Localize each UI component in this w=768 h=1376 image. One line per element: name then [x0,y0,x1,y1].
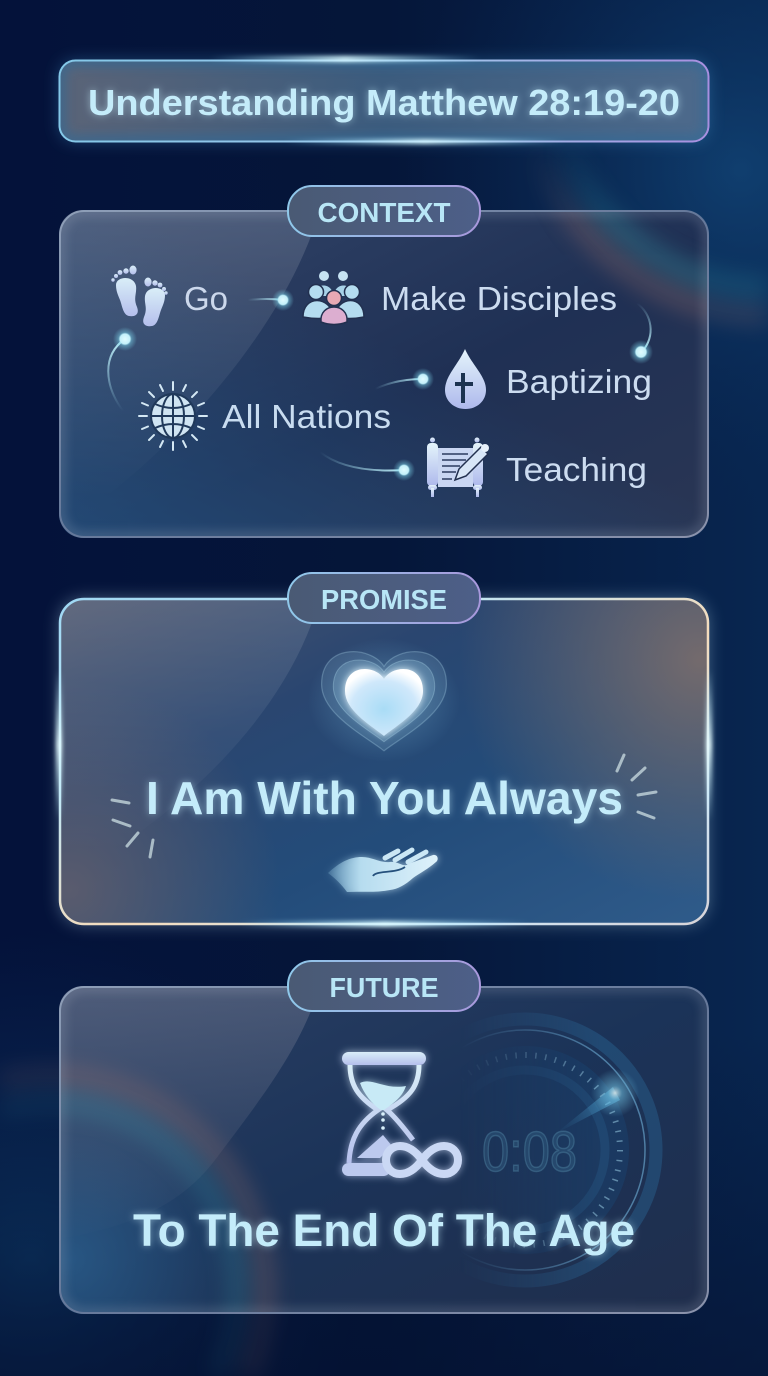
label: baptizing: Baptizing [506,363,652,400]
icon: open hand [328,850,438,892]
connector: baptizing to all nations [375,368,434,390]
connector: all nations to teaching [320,452,415,481]
icon: left sparks [112,800,153,857]
connector: go to make disciples [248,289,294,311]
icon: hourglass with infinity [342,1052,458,1176]
icon: group of people [303,271,364,324]
badge: context [288,186,480,236]
clock dial [476,1012,662,1288]
panel: future [59,986,709,1314]
label: all nations: All Nations [222,398,391,435]
future text: To The End Of The Age [133,1205,635,1256]
icon: globe with rays [139,382,207,450]
digital readout: 0:08 [482,1120,577,1184]
connector: make disciples to baptizing [629,303,653,364]
badge: future [288,961,480,1011]
title text: Understanding Matthew 28:19-20 [88,82,680,123]
panel: context [59,210,709,538]
label: go: Go [184,280,228,317]
icon: water drop with cross [445,349,486,409]
icon: footprints [111,266,168,326]
label: teaching: Teaching [506,451,647,488]
label: make disciples: Make Disciples [381,280,617,317]
panel: promise [56,598,712,927]
badge: promise [288,573,480,623]
badge: context: CONTEXT [318,197,450,228]
badge: promise: PROMISE [321,584,447,615]
icon: glowing heart [308,638,460,762]
connector: all nations to go [108,327,137,411]
title banner [59,56,709,144]
icon: right sparks [617,755,656,818]
icon: scroll and pen [427,438,489,497]
badge: future: FUTURE [330,972,438,1003]
promise text: I Am With You Always [146,772,623,824]
